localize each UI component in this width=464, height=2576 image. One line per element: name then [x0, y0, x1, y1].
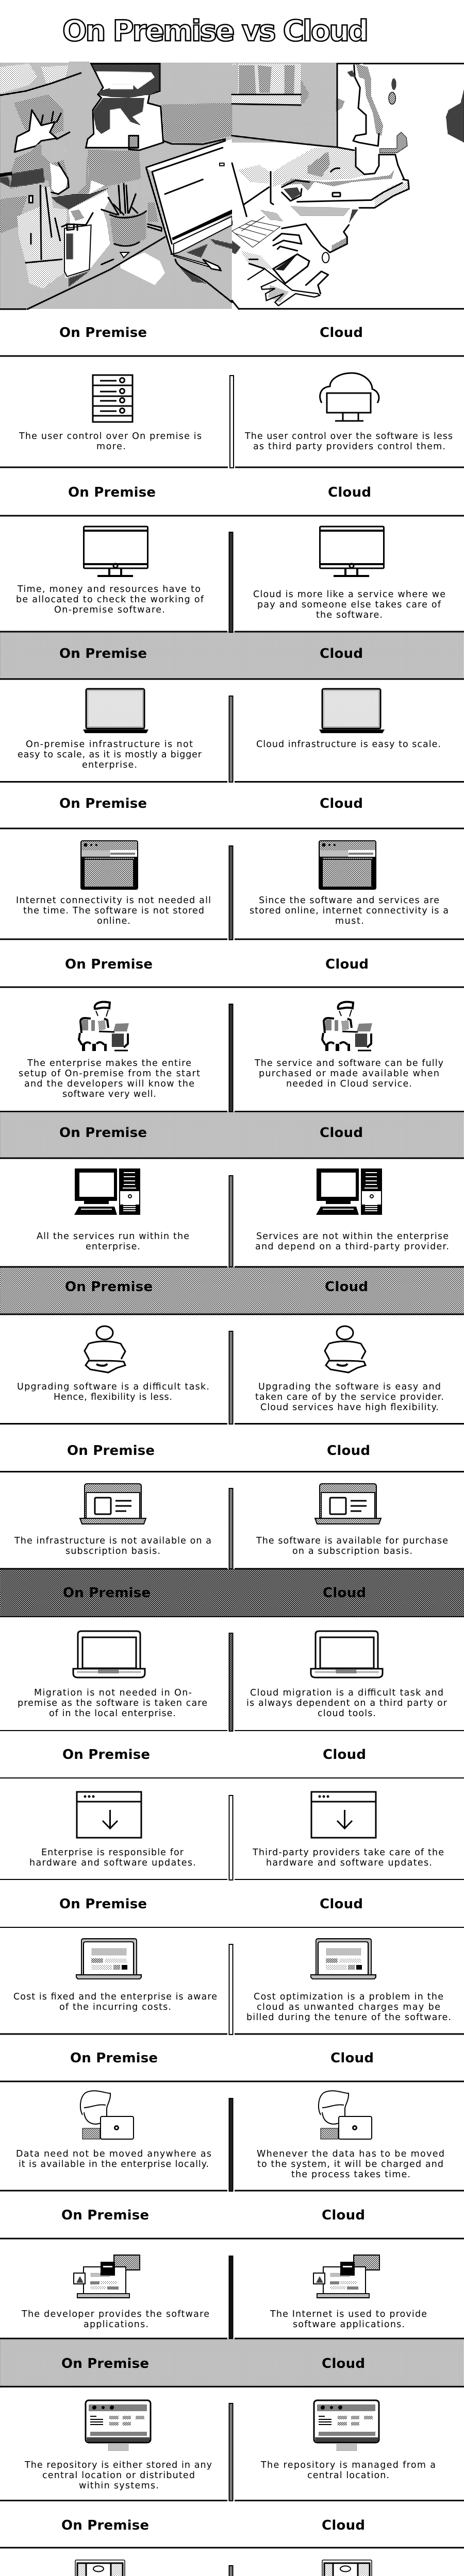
- divider: [229, 846, 233, 940]
- text: cloud: Upgrading the software is easy and: [258, 1382, 441, 1392]
- text: on premise: Enterprise is responsible for: [41, 1848, 184, 1858]
- text: cloud: Cloud infrastructure is easy to scale.: [256, 739, 441, 750]
- text: cloud: [270, 2309, 427, 2330]
- text: cloud: on a subscription basis.: [292, 1546, 412, 1556]
- icon: monitor dashboard: [86, 2400, 151, 2451]
- text: cloud: The software is available for purchase: [256, 1536, 448, 1546]
- text: cloud: purchased or made available when: [259, 1069, 439, 1079]
- icon: monitor: [84, 527, 148, 576]
- text: on premise: [16, 584, 204, 615]
- icon: browser window: [319, 841, 376, 889]
- header: columns: [61, 2208, 365, 2223]
- header: columns: Cloud: [320, 325, 363, 341]
- text: cloud: [250, 895, 449, 926]
- icon: person outline: [325, 1326, 366, 1372]
- text: on premise: hardware and software updates.: [29, 1858, 196, 1868]
- text: on premise: Upgrading software is a difficult task.: [17, 1382, 209, 1392]
- header: columns: On Premise: [68, 485, 156, 500]
- text: on premise: The developer provides the software: [21, 2309, 209, 2319]
- header: columns: [59, 325, 363, 341]
- text: cloud: [255, 1382, 444, 1413]
- text: on premise: easy to scale, as it is mostly a bigger: [18, 750, 202, 760]
- text: on premise: Data need not be moved anywhere as: [16, 2149, 211, 2159]
- header band: Cloud: [322, 2356, 365, 2371]
- text: cloud: to the system, it will be charged and: [257, 2159, 443, 2170]
- icon: laptop: [319, 689, 385, 733]
- divider: [229, 2566, 233, 2576]
- text: cloud: hardware and software updates.: [266, 1858, 432, 1868]
- text: on premise: it is available in the enterprise locally.: [19, 2159, 209, 2170]
- header band: [0, 632, 464, 679]
- header band: Cloud: [320, 1125, 363, 1141]
- header: columns: On Premise: [65, 957, 153, 972]
- text: cloud: [254, 1058, 443, 1089]
- text: on premise: [16, 2149, 211, 2170]
- panel: row 1 user control: [0, 325, 464, 468]
- header: columns: On Premise: [61, 2518, 149, 2533]
- text: cloud: taken care of by the service provider.: [255, 1392, 444, 1402]
- divider: [229, 1331, 233, 1424]
- text: cloud: cloud as unwanted charges may be: [257, 2002, 440, 2012]
- text: on premise: Internet connectivity is not needed all: [16, 895, 211, 906]
- panel: row 14 repository: [0, 2338, 464, 2502]
- header band: [0, 1267, 464, 1314]
- header: columns: On Premise: [61, 2208, 149, 2223]
- text: cloud: [256, 1536, 448, 1556]
- text: cloud: [244, 431, 453, 452]
- divider: [229, 2256, 233, 2338]
- title: On Premise vs Cloud: [62, 14, 369, 48]
- text: cloud: Services are not within the enterprise: [256, 1231, 449, 1242]
- icon: person outline: [85, 1326, 125, 1372]
- header band: On Premise: [61, 2356, 149, 2371]
- divider: [229, 1004, 233, 1112]
- header: columns: On Premise: [67, 1443, 155, 1459]
- text: cloud: Cloud is more like a service where we: [253, 589, 445, 600]
- panel: row 7 upgrading: [0, 1267, 464, 1425]
- text: cloud: [252, 1848, 444, 1868]
- header band: Cloud: [320, 646, 363, 662]
- text: cloud: and depend on a third-party provider.: [255, 1242, 449, 1252]
- text: on premise: The user control over On premise is: [19, 431, 202, 442]
- header: columns: On Premise: [70, 2050, 158, 2066]
- icon: laptop: [83, 689, 148, 733]
- text: cloud: [246, 1992, 451, 2023]
- header: columns: Cloud: [322, 2518, 365, 2533]
- header: columns: Cloud: [325, 957, 369, 972]
- text: on premise: subscription basis.: [65, 1546, 160, 1556]
- header: columns: On Premise: [62, 1747, 150, 1762]
- text: on premise: [19, 431, 202, 452]
- text: cloud: The service and software can be fully: [254, 1058, 443, 1069]
- text: on premise: [18, 739, 202, 770]
- icon: download window: [311, 1792, 376, 1838]
- panel: row 11 cost: [0, 1896, 464, 2035]
- text: on premise: [19, 1058, 200, 1099]
- header band: [0, 1569, 464, 1617]
- text: on premise: On-premise infrastructure is not: [26, 739, 193, 750]
- icon: laptop with document: [314, 2560, 379, 2576]
- text: on premise: [18, 1688, 207, 1719]
- text: cloud: The Internet is used to provide: [270, 2309, 427, 2319]
- text: on premise: [16, 895, 211, 926]
- text: cloud: must.: [335, 916, 364, 926]
- divider: [229, 1795, 233, 1880]
- text: on premise: On-premise software.: [54, 605, 165, 615]
- text: on premise: setup of On-premise from the start: [19, 1069, 200, 1079]
- header: columns: Cloud: [330, 2050, 374, 2066]
- text: cloud: [246, 1688, 448, 1719]
- text: cloud: the software.: [316, 610, 383, 620]
- header: columns: On Premise: [59, 325, 147, 341]
- icon: developer laptop: [74, 2255, 140, 2298]
- header band: On Premise: [63, 1585, 151, 1601]
- text: on premise: central location or distributed: [42, 2470, 195, 2481]
- text: cloud: Whenever the data has to be moved: [257, 2149, 444, 2159]
- icon: desktop computer: [316, 1168, 382, 1215]
- text: on premise: [37, 1231, 189, 1252]
- icon: man with laptop: [319, 2091, 372, 2139]
- divider: [229, 1633, 233, 1731]
- text: cloud: needed in Cloud service.: [286, 1079, 412, 1089]
- header: columns: Cloud: [328, 485, 371, 500]
- icon: download window: [77, 1792, 141, 1838]
- icon: laptop with document: [67, 2560, 132, 2576]
- text: cloud: is always dependent on a third party or: [246, 1698, 448, 1708]
- panel: row 9 migration: [0, 1569, 464, 1732]
- panel: row 2 resources: [0, 485, 464, 633]
- panel: row 4 connectivity: [0, 796, 464, 940]
- icon: desktop computer: [74, 1168, 140, 1215]
- divider: [229, 1944, 233, 2035]
- header band: On Premise: [65, 1279, 153, 1295]
- text: on premise: applications.: [84, 2319, 148, 2330]
- text: cloud: software applications.: [293, 2319, 405, 2330]
- header: columns: [70, 2050, 374, 2066]
- divider: [229, 696, 233, 782]
- text: on premise: The repository is either stored in any: [24, 2460, 212, 2470]
- text: cloud: [255, 1231, 449, 1252]
- text: on premise: and the developers will know the: [24, 1079, 194, 1089]
- text: cloud: [260, 2460, 436, 2481]
- text: on premise: The enterprise makes the entire: [27, 1058, 191, 1069]
- text: on premise: [29, 1848, 196, 1868]
- header: columns: Cloud: [320, 1896, 363, 1912]
- panel: row 10 updates: [0, 1747, 464, 1880]
- text: on premise: All the services run within the: [37, 1231, 189, 1242]
- text: cloud: Cloud migration is a difficult task and: [250, 1688, 443, 1698]
- panel: row 5 setup: [0, 957, 464, 1112]
- icon: monitor: [320, 527, 384, 576]
- header band: Cloud: [323, 1585, 366, 1601]
- icon: server rack: [93, 375, 132, 422]
- panel: row 13 applications: [0, 2208, 464, 2340]
- text: on premise: online.: [97, 916, 130, 926]
- text: on premise: be allocated to check the working of: [16, 595, 204, 605]
- text: cloud: The user control over the software is less: [244, 431, 453, 442]
- icon: laptop outline: [311, 1631, 383, 1677]
- text: on premise: software very well.: [62, 1089, 156, 1099]
- icon: browser window: [81, 841, 138, 889]
- text: cloud: Cloud services have high flexibility.: [260, 1402, 439, 1413]
- divider: [229, 2403, 233, 2501]
- panel: row 12 data movement: [0, 2050, 464, 2192]
- header: columns: Cloud: [320, 796, 363, 811]
- text: on premise: The infrastructure is not available on a: [14, 1536, 211, 1546]
- text: cloud: Since the software and services are: [259, 895, 439, 906]
- text: on premise: [14, 1536, 211, 1556]
- header: columns: [59, 796, 363, 811]
- divider: [230, 376, 234, 468]
- icon: monitor dashboard: [314, 2400, 379, 2451]
- divider: [229, 2098, 233, 2191]
- text: on premise: of in the local enterprise.: [49, 1708, 176, 1719]
- photo: person typing on a laptop at a desk: [0, 62, 464, 310]
- header band: On Premise: [59, 646, 147, 662]
- header: columns: [61, 2518, 365, 2533]
- icon: laptop with blocks: [76, 1939, 141, 1979]
- header: columns: Cloud: [322, 2208, 365, 2223]
- text: on premise: [17, 1382, 209, 1402]
- text: cloud: cloud tools.: [318, 1708, 376, 1719]
- text: cloud: billed during the tenure of the software.: [246, 2012, 451, 2023]
- text: cloud: pay and someone else takes care of: [257, 600, 441, 610]
- header band: [0, 2338, 464, 2386]
- divider: [229, 1176, 233, 1267]
- header: columns: [59, 1896, 363, 1912]
- header band: On Premise: [59, 1125, 147, 1141]
- text: on premise: Migration is not needed in On-: [34, 1688, 192, 1698]
- icon: laptop with card: [80, 1484, 146, 1524]
- text: on premise: enterprise.: [82, 760, 137, 770]
- text: cloud: stored online, internet connectivity is a: [250, 906, 449, 916]
- icon: laptop with blocks: [311, 1939, 376, 1979]
- text: cloud: the process takes time.: [291, 2170, 410, 2180]
- header: columns: [67, 1443, 370, 1459]
- panel: row 8 subscription: [0, 1443, 464, 1570]
- icon: man with laptop: [80, 2091, 134, 2139]
- text: on premise: the time. The software is not stored: [23, 906, 204, 916]
- text: on premise: [21, 2309, 209, 2330]
- text: cloud: Cost optimization is a problem in the: [254, 1992, 443, 2002]
- header: columns: On Premise: [59, 796, 147, 811]
- header: columns: [65, 957, 369, 972]
- text: cloud: The repository is managed from a: [260, 2460, 436, 2470]
- header: columns: On Premise: [59, 1896, 147, 1912]
- text: cloud: Third-party providers take care of the: [252, 1848, 444, 1858]
- header: columns: [68, 485, 371, 500]
- header: columns: [62, 1747, 366, 1762]
- icon: person at laptop: [79, 1002, 129, 1051]
- panel: row 3 infrastructure: [0, 632, 464, 783]
- text: on premise: more.: [96, 442, 126, 452]
- header: columns: Cloud: [327, 1443, 370, 1459]
- text: on premise: within systems.: [79, 2481, 159, 2491]
- text: on premise: Cost is fixed and the enterprise is aware: [13, 1992, 217, 2002]
- divider: [229, 1488, 233, 1569]
- header: columns: Cloud: [323, 1747, 366, 1762]
- header band: Cloud: [325, 1279, 368, 1295]
- text: on premise: enterprise.: [86, 1242, 140, 1252]
- text: cloud: [257, 2149, 444, 2180]
- text: on premise: [24, 2460, 212, 2491]
- text: on premise: premise as the software is taken care: [18, 1698, 207, 1708]
- text: on premise: Time, money and resources have to: [17, 584, 201, 595]
- text: cloud: [253, 589, 445, 620]
- icon: laptop outline: [73, 1631, 145, 1677]
- header band: [0, 1112, 464, 1158]
- icon: cloud with monitor: [320, 373, 379, 421]
- text: on premise: Hence, flexibility is less.: [54, 1392, 172, 1402]
- text: cloud: central location.: [307, 2470, 389, 2481]
- text: cloud: as third party providers control them.: [253, 442, 445, 452]
- text: on premise: [13, 1992, 217, 2012]
- panel: row 6 services: [0, 1112, 464, 1268]
- text: on premise: of the incurring costs.: [59, 2002, 171, 2012]
- divider: [229, 532, 233, 632]
- icon: laptop with card: [315, 1484, 381, 1524]
- icon: person at laptop: [322, 1002, 372, 1051]
- icon: developer laptop: [313, 2255, 379, 2298]
- panel: row 15 integrations: [0, 2518, 464, 2576]
